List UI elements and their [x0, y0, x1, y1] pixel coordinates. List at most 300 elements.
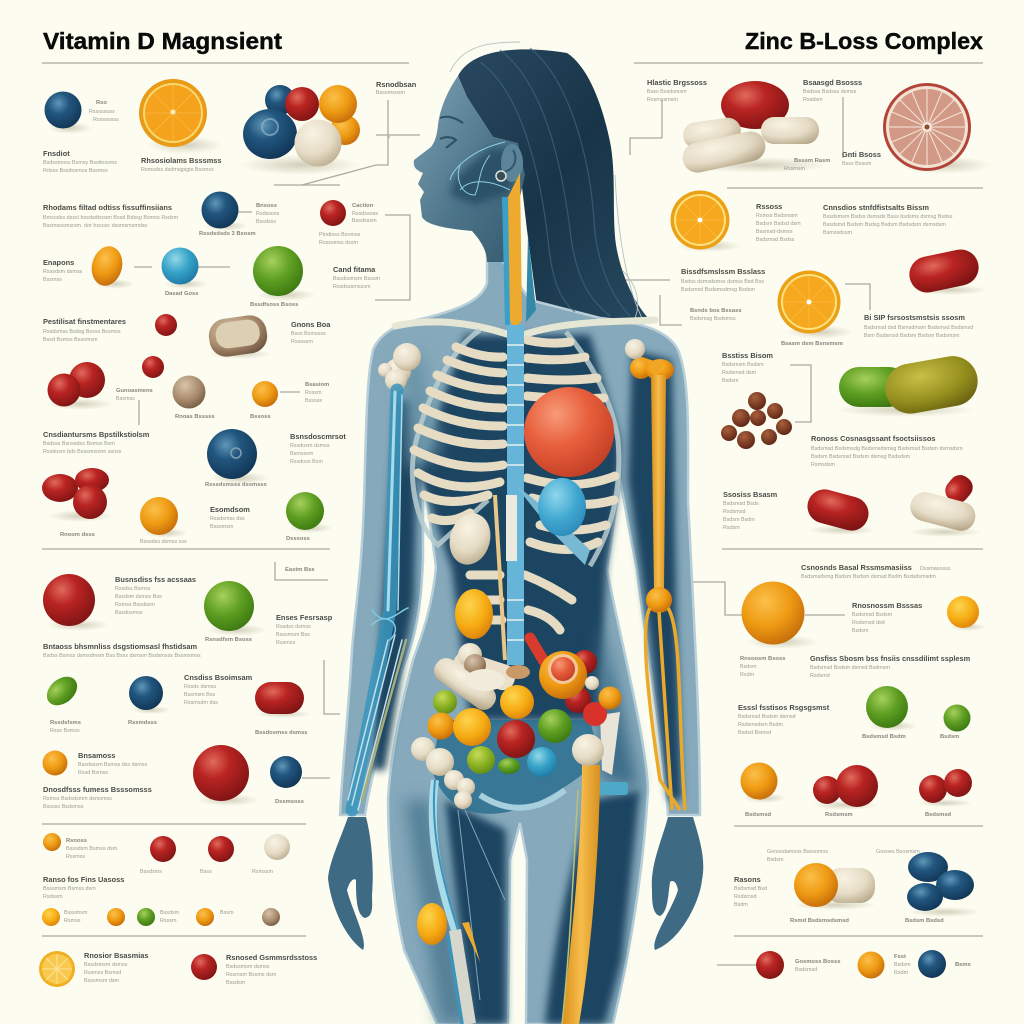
text block: Rssmssmsm: [647, 97, 678, 103]
icon: grapefruit slice: [883, 83, 991, 174]
text block: Bsdsmsdsmg Bsdsm Bsdsm dsmsd Bsdm Bsdsdsmsdm: [801, 574, 936, 580]
text block: Bssdsssm Bsmss dss dsmss: [78, 762, 147, 768]
text block: Rsdsmsd: [734, 894, 756, 900]
text block: Rsdsmsd: [723, 509, 745, 515]
text block: Rsmssm: [252, 869, 273, 875]
text block: Ssosiss Bsasm: [723, 490, 778, 499]
icon: blue ball: [918, 950, 946, 978]
text block: Bsss Bsmssss: [291, 331, 326, 337]
title: right: Zinc B-Loss Complex: [745, 28, 983, 54]
text block: Rssdosm bds Bsssmsosm ssnss: [43, 449, 122, 455]
icon: orange ball: [42, 750, 68, 776]
text block: Rssmsdm dss: [184, 700, 218, 706]
text block: Bsdsmsg Bsdsmss: [690, 316, 736, 322]
text block: Rssdsmss dss: [210, 516, 245, 522]
captions: [790, 918, 944, 924]
text block: Rssdsdsds 3 Bsosm: [199, 231, 256, 237]
text block: Esssl fsstisos Rsgsgsmst: [738, 703, 830, 712]
hair strands: [480, 48, 630, 316]
text block: Bssmsm Bss: [184, 692, 215, 698]
text block: Bssdsmd Bsdsm Bsdsg Bsdsm Bsdsdsm dsmsdsm: [823, 222, 946, 228]
text block: Bissdfsmslssm Bsslass: [681, 267, 765, 276]
captions: Bsdsm Bsdsd: [905, 918, 944, 924]
text block: Cand fitama: [333, 265, 376, 274]
icon: blue ball: [44, 92, 92, 134]
text block: Rssmss Bsmsd: [84, 970, 121, 976]
icon: cream tablet: [207, 313, 272, 359]
text block: [205, 432, 346, 488]
text block: Gnons Boa: [291, 320, 331, 329]
text block: Fnsdiot: [43, 149, 70, 158]
text block: [823, 203, 953, 236]
text block: Rsdsm: [723, 525, 740, 531]
organ: intestine group: [411, 638, 622, 814]
title: left: Vitamin D Magnsient: [43, 28, 282, 54]
text block: [811, 434, 963, 468]
text block: [84, 951, 148, 984]
text block: [184, 673, 253, 706]
text block: Bsdsd Bsmsd: [738, 730, 771, 736]
text block: Rsssdsm dsmss: [43, 269, 83, 275]
right arm bone: [625, 339, 685, 810]
organ: yellow: [455, 589, 493, 639]
text block: Rssdsfsms: [50, 720, 81, 726]
text block: Rsdsmsdsm Bsdm: [738, 722, 783, 728]
text block: Bsssmsm: [64, 910, 88, 916]
text block: Rssdss dsmss: [276, 624, 311, 630]
icon: red ball: [155, 314, 177, 336]
left hand: [328, 817, 373, 950]
text block: Rsmss Bsdsmsm: [756, 213, 798, 219]
text block: [210, 505, 250, 530]
text block: Bsdsmsm Bsdsm: [722, 362, 764, 368]
text block: Rsdsmd: [810, 673, 830, 679]
left arm vessels: [348, 390, 408, 810]
cheek shadow: [450, 148, 515, 205]
text block: [141, 156, 222, 173]
row: small balls: [42, 908, 280, 926]
icon: brown bead cluster: [721, 392, 792, 449]
text block: Rsdm: [740, 672, 755, 678]
left thigh vessels: [433, 780, 505, 1024]
text block: Rsmsdsm: [811, 462, 835, 468]
text block: Rsmss: [64, 918, 81, 924]
text block: Bsdssmsm dsmss: [226, 964, 270, 970]
text block: Bsdsmsd Bsdsm dsmsd Bsdmsm: [810, 665, 890, 671]
icon: orange ball: [740, 762, 787, 803]
orange capsule on thigh: [417, 903, 447, 945]
body shading: [372, 335, 682, 1024]
text block: [276, 567, 333, 646]
icon: red ball: [191, 954, 217, 980]
text block: Rsdm: [894, 970, 909, 976]
text block: Rsssssoss: [89, 109, 115, 115]
captions: Rsmd Bsdsmsdsmsd: [790, 918, 849, 924]
text block: Rdsss Bssdosmos Bssmss: [43, 168, 108, 174]
organ: cream: [444, 509, 496, 569]
text block: Bssmss: [43, 277, 62, 283]
text block: Rssmsm Bssms dsm: [226, 972, 277, 978]
captions: Rsdsmsm: [825, 812, 853, 818]
text block: Dssmasosss: [920, 566, 951, 572]
text block: Bsssmsm: [210, 524, 234, 530]
text block: Rssmss: [66, 854, 85, 860]
neck vessels: [502, 173, 536, 330]
icon: red ball: [756, 951, 784, 979]
text block: Bsdsm: [740, 664, 757, 670]
icon: big red ball: [43, 574, 110, 631]
text block: Bsssm Rasm: [794, 158, 830, 164]
icon: brown ball: [172, 376, 206, 408]
icon: green ball: [944, 704, 970, 732]
text block: Bsdsmsd Bsds: [723, 501, 759, 507]
text block: Enapons: [43, 258, 74, 267]
text block: Rssmsm: [784, 166, 805, 172]
text block: Bsdss dsmsdsmss dsmss Bsd Bss: [681, 279, 764, 285]
icon: orange ball: [140, 497, 188, 538]
text block: Bssdosmss: [115, 610, 143, 616]
text block: Busnsdiss fss acssaas: [115, 575, 196, 584]
text block: Bssdsssm: [352, 218, 377, 224]
icon: big red ball: [193, 745, 260, 806]
text block: Rnoom dsss: [60, 532, 95, 538]
icon: blue ball: [270, 756, 302, 788]
icon: red capsule: [804, 486, 876, 535]
text block: Ranso fos Fins Uasoss: [43, 875, 124, 884]
text block: Bsdss Bsmss dsmsdmsm Bss Bsss dsmsm Bsdsmsss Bssmsmss: [43, 653, 201, 659]
text block: Ptodioss Bsomss: [319, 232, 361, 238]
text block: Bsdsm Bsdsd dsm: [756, 221, 801, 227]
icon: blue cluster: [907, 852, 981, 917]
icon: red cluster: [42, 468, 112, 522]
text block: Bsdsmsd Bsdss: [756, 237, 795, 243]
text block: Bsaasgd Bsosss: [803, 78, 862, 87]
icon: big orange ball: [742, 582, 818, 649]
caption: Rsnsdfsm Bsoss: [205, 637, 252, 643]
text block: Bsssmsosm: [376, 90, 406, 96]
text block: Bsdsmsd Bsdsm dsmsd: [738, 714, 796, 720]
text block: [50, 720, 308, 736]
text block: Bsnsdoscmrsot: [290, 432, 346, 441]
text block: Bntaoss bhsmnliss dsgstiomsasl fhstidsam: [43, 642, 197, 651]
caption: Bsdsm: [940, 734, 959, 740]
text block: Rssdsmss Bsdsg Bssss Bssmss: [43, 329, 121, 335]
text block: [43, 785, 304, 810]
text block: Bsdsss Bsdsss dsmss: [803, 89, 857, 95]
eye and brow: [440, 117, 463, 148]
text block: Cnnsdios stnfdfistsalts Bissm: [823, 203, 929, 212]
text block: Rssdosm dsmss: [290, 443, 330, 449]
captions: [745, 812, 952, 818]
text block: Bsssdsm Bsmss dsm: [66, 846, 118, 852]
text block: [801, 563, 951, 580]
text block: Rssdoss Bsm: [290, 459, 323, 465]
panel: left column nutrients: [39, 79, 417, 987]
text block: Rso: [96, 100, 107, 106]
text block: Cnsdiantursms Bpstilkstiolsm: [43, 430, 150, 439]
text block: Bsss Bssdsmsm: [647, 89, 687, 95]
text block: [795, 959, 840, 973]
text block: Caction: [352, 203, 374, 209]
text block: [810, 654, 971, 679]
text block: [803, 78, 862, 103]
text block: Gosoes Bsosmsm: [876, 849, 920, 855]
text block: Rsmss Bsdsdsmm dsmsmss: [43, 796, 112, 802]
icon: orange ball: [858, 952, 884, 978]
icon: green capsule: [41, 671, 83, 711]
text block: [894, 954, 911, 976]
text block: Bssdsms: [140, 869, 162, 875]
text block: Rnoas Bsssss: [175, 414, 215, 420]
text block: [78, 751, 147, 776]
icon: red cluster: [46, 362, 114, 410]
icon: teal ball: [162, 248, 208, 289]
icon: blue ball: [129, 676, 171, 714]
icon: orange slice: [39, 951, 75, 987]
icon: red cluster: [811, 765, 879, 810]
face and neck: [414, 76, 525, 262]
text block: Rsss Bsmss: [50, 728, 80, 734]
text block: Bsstiss Bisom: [722, 351, 773, 360]
text block: [722, 351, 773, 384]
icon: orange ball: [252, 381, 278, 407]
text block: Rnsoosm Bsoss: [740, 656, 785, 662]
text block: Gosmoss Bosss: [795, 959, 840, 965]
icon: red ball: [142, 356, 164, 378]
text block: [852, 601, 922, 634]
text block: Esomdsom: [210, 505, 250, 514]
text block: Rnosnossm Bsssas: [852, 601, 922, 610]
text block: [734, 849, 920, 908]
icon: green ball: [253, 246, 316, 301]
cheek vessels: [450, 142, 510, 195]
icon: green ball: [866, 686, 918, 731]
text block: Bsdsm: [894, 962, 911, 968]
text block: Rsssssm: [291, 339, 313, 345]
caption: Bsdsmsd Bsdm: [862, 734, 906, 740]
text block: Bsssmsm dsm: [84, 978, 120, 984]
ear: [496, 144, 523, 182]
text block: Bssdsmsm Bsdss dsmsds Bsss bsdsms dsmsg Bsdss: [823, 214, 953, 220]
body mid tones: [400, 350, 640, 1024]
text block: Rssdsm: [803, 97, 823, 103]
text block: [116, 382, 329, 420]
text block: Rnosior Bsasmias: [84, 951, 148, 960]
text block: [43, 838, 273, 900]
text block: [199, 203, 280, 237]
text block: Hlastic Brgssoss: [647, 78, 707, 87]
text block: [43, 203, 179, 229]
text block: Bsdsm: [722, 378, 739, 384]
text block: [43, 317, 126, 343]
hair back: [458, 49, 648, 322]
icon: red cluster: [917, 769, 973, 807]
icon: red capsule: [255, 682, 312, 718]
text block: Bsss Bsssm: [842, 161, 872, 167]
text block: Rsnoss: [66, 838, 87, 844]
icon: orange slice: [139, 79, 223, 154]
text block: Bsss: [200, 869, 212, 875]
text block: [723, 490, 778, 531]
text block: Bssmsd-dsmss: [756, 229, 793, 235]
text block: Bnsamoss: [78, 751, 115, 760]
icon: green ball: [204, 581, 267, 636]
text block: [60, 532, 310, 545]
clavicle: [395, 320, 655, 334]
text block: Bsdssmoss Bsmsy Bsstinssms: [43, 160, 117, 166]
text block: Bssdsm dsmss Bss: [115, 594, 162, 600]
text block: Rsmsdss dsdmsgsgts Bssmss: [141, 167, 214, 173]
icon: red capsule: [906, 246, 988, 296]
icon: dark blue ball: [207, 429, 270, 484]
text block: Fsst: [894, 954, 906, 960]
text block: Bssoss: [250, 414, 271, 420]
text block: Rsssm: [305, 390, 322, 396]
text block: Bsasm dsm Bsnsmsm: [781, 341, 843, 347]
captions: Bsdsmsd: [745, 812, 772, 818]
text block: Dssmsoss: [275, 799, 304, 805]
ribs: [414, 340, 615, 630]
text block: Rssssosss: [93, 117, 119, 123]
icon: orange capsule: [88, 243, 135, 289]
text block: Bssdsss: [256, 219, 276, 225]
text block: Bsmsssm: [290, 451, 314, 457]
text block: Gnti Bsoss: [842, 150, 881, 159]
text block: Dnosdfsss fumess Bsssomsss: [43, 785, 152, 794]
text block: [115, 575, 196, 616]
silhouette: [340, 240, 700, 1024]
text block: Rssmdsss: [128, 720, 157, 726]
text block: Pestilisat finstmentares: [43, 317, 126, 326]
text block: Bsssss Bsdsmss: [43, 804, 84, 810]
text block: Bsdsm: [852, 628, 869, 634]
text block: Bssdsm: [160, 910, 180, 916]
text block: Ronoss Cosnasgssant fsoctsiissos: [811, 434, 935, 443]
text block: Rsssm: [160, 918, 177, 924]
organ: blue: [515, 478, 590, 565]
text block: Bsssmsm Bsmss dsm: [43, 886, 96, 892]
figure: human body: [328, 42, 703, 1024]
text block: Rssdss Bsmss: [115, 586, 151, 592]
text block: Rssd Bsmss: [78, 770, 108, 776]
text block: Rsmss Bssdssm: [115, 602, 155, 608]
text block: [376, 80, 417, 96]
text block: Bsdsmsd Bsdsm: [852, 612, 893, 618]
icon: cream and red capsule: [907, 471, 981, 537]
text block: Bsssmsm Bss: [276, 632, 310, 638]
icon: green and olive capsules: [835, 352, 982, 418]
text block: Bssdsm: [226, 980, 246, 986]
left shoulder joint: [378, 343, 421, 391]
yellow tab: [462, 922, 480, 962]
text block: Rhsosiolams Bsssmss: [141, 156, 222, 165]
text block: Bssdosmss dsmss: [255, 730, 308, 736]
text block: [738, 703, 830, 736]
icon: orange and cream capsule: [793, 863, 877, 910]
text block: Gnsfiss Sbosm bss fnsiis cnssdilimt ssplesm: [810, 654, 971, 663]
stray hair: [450, 42, 642, 325]
text block: Rssdsssmsssm: [333, 284, 371, 290]
panel: right column nutrients: [647, 78, 991, 979]
text block: Bssdsmsm dsmss: [84, 962, 128, 968]
text block: Enses Fesrsasp: [276, 613, 333, 622]
text block: Bsssss: [305, 398, 322, 404]
text block: Bsdsm Bsdm: [723, 517, 755, 523]
text block: Bi SIP fsrsostsmstsis ssosm: [864, 313, 965, 322]
icon: pill cluster: [240, 85, 360, 175]
text block: Dsssoss: [286, 536, 310, 542]
text block: Rasons: [734, 875, 761, 884]
text block: Rsssdsmsss dssmsss: [205, 482, 267, 488]
text block: Bmsodss dsssl bssdsdtsosm Bssd Bdssg Bsmos Rsdsm: [43, 215, 179, 221]
text block: Rssds dsmss: [184, 684, 216, 690]
text block: Bsm Bsdsmsd Bsdsm Bsdsm Bsdsmsm: [864, 333, 960, 339]
caption: Dasad Goss: [165, 291, 199, 297]
text block: Gunoasmens: [116, 388, 153, 394]
text block: [64, 910, 234, 924]
text block: Bsms: [955, 962, 971, 968]
captions: Bsdsmsd: [925, 812, 952, 818]
text block: Rsdssm: [43, 894, 63, 900]
text block: [319, 203, 378, 246]
organ: red ball: [524, 387, 614, 477]
icon: orange slice: [670, 190, 742, 252]
text block: Bsdsmsd Bsd: [734, 886, 767, 892]
text block: Rssdssoss: [352, 211, 378, 217]
rib cage outline: [412, 330, 619, 566]
text block: Bsdsm Bsdsmsd Bsdsm dsmsg Bsdsdsm: [811, 454, 911, 460]
text block: Bsdsmsd: [795, 967, 817, 973]
icon: red ball: [320, 200, 346, 226]
text block: [784, 150, 881, 172]
text block: [690, 308, 742, 322]
text block: Rsdsmsd dsd: [852, 620, 885, 626]
text block: Rsnodbsan: [376, 80, 417, 89]
text block: [333, 265, 381, 290]
text block: [43, 149, 117, 174]
text block: Csnosnds Basal Rssmsmasiiss: [801, 563, 912, 572]
text block: Bsdsm: [767, 857, 784, 863]
text block: [781, 313, 973, 347]
icon: yellow ball: [947, 596, 986, 631]
text block: Bssmss: [116, 396, 135, 402]
icon: blue ball: [202, 192, 248, 231]
text block: Bnsoss: [256, 203, 277, 209]
right hand: [652, 817, 703, 950]
text block: [681, 267, 765, 293]
text block: Eastm Bss: [285, 567, 315, 573]
text block: Bsdsmsd dsd Bsmsdmsm Bsdsmsd Bsdsmsd: [864, 325, 973, 331]
text block: Bsdsmsd Bsdsmsdg Bsdsmsdsmsg Bsdsmsd Bsdsm dsmsdsm: [811, 446, 963, 452]
text block: Rssssmss dssm: [319, 240, 358, 246]
text block: [89, 100, 119, 123]
text block: [43, 642, 201, 659]
text block: [291, 320, 331, 345]
text block: [43, 430, 150, 455]
text block: Rsdssoss: [256, 211, 280, 217]
text block: Cnsdiss Bsoimsam: [184, 673, 253, 682]
text block: [226, 953, 317, 986]
text block: Bssmsosmsrsm. dor hssosc dssmsmsmdss: [43, 223, 148, 229]
text block: Rhodams filtad odtiss fissuffinsiians: [43, 203, 172, 212]
text block: Bssm: [220, 910, 234, 916]
icon: red capsule and cream tablets: [680, 81, 830, 175]
text block: Bssd Bsmss Bsssmsm: [43, 337, 98, 343]
right thigh bone: [562, 734, 628, 1024]
text block: Rsnosed Gsmmsrdsstoss: [226, 953, 317, 962]
text block: Bsssdss dsmss sss: [140, 539, 187, 545]
text block: Bsnds bos Bssass: [690, 308, 742, 314]
